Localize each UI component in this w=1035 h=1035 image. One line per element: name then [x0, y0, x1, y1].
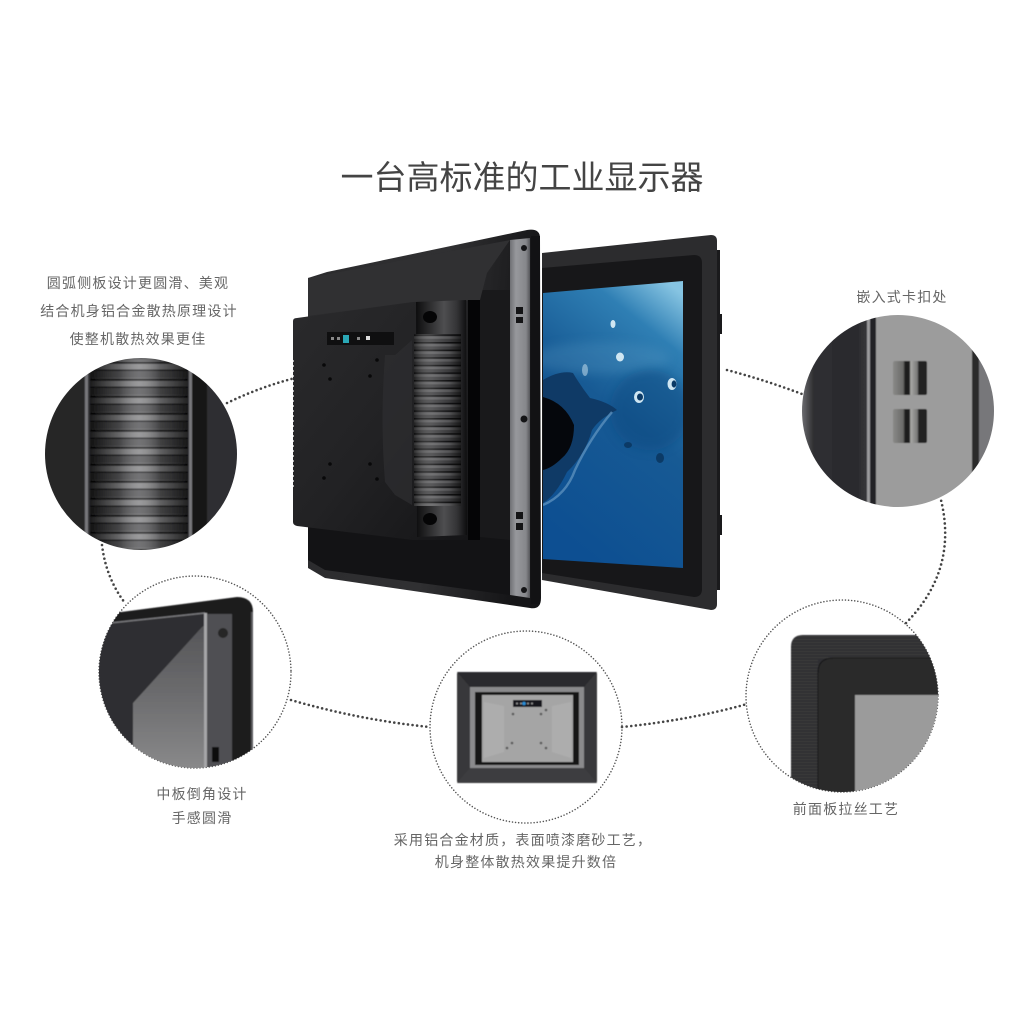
- dark side edge: [531, 236, 540, 604]
- inner bezel: [542, 255, 702, 597]
- brushed texture: [792, 636, 928, 787]
- indicator strip: [327, 332, 394, 345]
- caption: chamfer: 手感圆滑: [172, 810, 232, 826]
- dark band: [870, 312, 876, 510]
- right dark band: [972, 350, 980, 472]
- connector: monitor to clip circle: [727, 370, 802, 394]
- connector: monitor to heat sink circle: [227, 378, 295, 403]
- slot: [212, 747, 219, 762]
- mount holes: [322, 358, 379, 481]
- caption: heat sink: 圆弧侧板设计更圆滑、美观: [47, 275, 229, 291]
- light line: [867, 312, 870, 510]
- circle: back view outline: [430, 631, 622, 823]
- left plate teeth: [292, 360, 294, 490]
- screen dark wave: [614, 368, 683, 446]
- strip screws and slots: [516, 245, 528, 593]
- plate side panels: [484, 702, 571, 758]
- caption: brushed panel: 前面板拉丝工艺: [793, 801, 899, 817]
- screen: [543, 281, 683, 568]
- circle: clip detail: [800, 312, 995, 510]
- connector: chamfer circle to back view circle: [291, 700, 430, 727]
- grey tray: [470, 687, 584, 768]
- connector: heat sink circle to chamfer circle: [102, 545, 125, 603]
- top highlight: [100, 613, 205, 624]
- silver strip: [510, 238, 530, 598]
- back monitor: [293, 230, 541, 608]
- splash hole: [543, 397, 574, 470]
- heat sink: [416, 300, 467, 537]
- grey screen: [854, 694, 938, 791]
- circle: brushed panel detail: [791, 635, 945, 800]
- black inner band: [475, 692, 579, 765]
- caption: heat sink: 结合机身铝合金散热原理设计: [40, 303, 238, 319]
- circle: chamfer outline: [99, 576, 291, 768]
- right dark band: [192, 373, 207, 535]
- connector: back view circle to brushed panel circle: [622, 704, 747, 727]
- front bezel: [542, 235, 717, 610]
- splash body: [543, 372, 617, 503]
- grey plate: [482, 695, 573, 762]
- ribs: [90, 358, 188, 553]
- dark face: [99, 614, 204, 744]
- side clips: [717, 250, 722, 590]
- inner lip: [817, 657, 930, 789]
- back plate: [293, 300, 480, 540]
- heat sink screws: [423, 311, 437, 525]
- caption: clip: 嵌入式卡扣处: [856, 289, 948, 305]
- silver line: [204, 613, 207, 773]
- edge: [251, 612, 253, 772]
- circle: heat sink detail: [45, 358, 237, 550]
- rear shell: [308, 230, 541, 608]
- right strip: [978, 359, 994, 463]
- upper chamfer: [308, 240, 510, 316]
- holes: [506, 709, 547, 749]
- connector: brushed panel circle to clip circle: [906, 500, 945, 623]
- fins: [414, 334, 461, 506]
- caption: chamfer: 中板倒角设计: [156, 786, 248, 802]
- right shell shadow: [480, 290, 510, 590]
- lower shell shadow: [308, 520, 510, 595]
- droplet shadows: [624, 380, 676, 463]
- caption: back view: 机身整体散热效果提升数倍: [435, 854, 617, 870]
- splash strand: [543, 412, 612, 505]
- upper window: [893, 361, 927, 395]
- caption: heat sink: [40, 275, 238, 347]
- circle: back view product: [457, 672, 597, 783]
- circle: chamfer detail: [90, 597, 253, 775]
- grey face: [133, 625, 205, 775]
- lower window: [893, 409, 927, 443]
- title: 一台高标准的工业显示器: [340, 159, 704, 196]
- rib shading: [90, 358, 188, 553]
- circle: brushed panel outline: [746, 600, 938, 792]
- droplets: [582, 320, 676, 403]
- caption: back view: 采用铝合金材质，表面喷漆磨砂工艺，: [394, 832, 652, 848]
- front monitor: [530, 235, 722, 610]
- caption: chamfer: [156, 786, 248, 826]
- rails: [84, 370, 193, 538]
- caption: back view: [394, 832, 652, 870]
- heat sink shadow: [468, 300, 480, 540]
- strip: [207, 614, 232, 774]
- indicators: [513, 700, 542, 707]
- screw: [218, 628, 228, 638]
- shaded frame bottom: [457, 768, 597, 783]
- screen haze: [543, 343, 664, 374]
- caption: heat sink: 使整机散热效果更佳: [70, 331, 206, 347]
- silver face: [876, 312, 973, 510]
- plate groove: [382, 340, 412, 505]
- shaded frame top: [457, 672, 597, 687]
- left panel: [45, 378, 84, 530]
